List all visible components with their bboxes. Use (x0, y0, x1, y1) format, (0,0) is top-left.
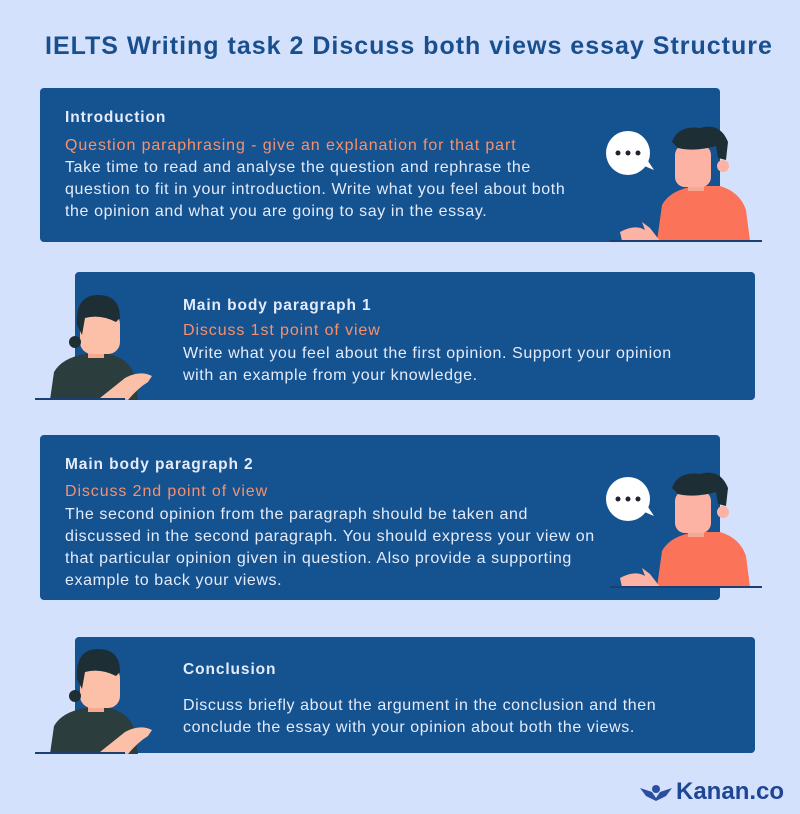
icon: man with speech bubble 1 (606, 126, 762, 242)
subtitle: introduction: Question paraphrasing - give an explanation for that part (65, 137, 517, 154)
text: body 2: that particular opinion given in question. Also provide a supporting (65, 550, 572, 567)
subtitle: body 2: Discuss 2nd point of view (65, 483, 268, 500)
text: conclusion: conclude the essay with your opinion about both the views. (183, 719, 635, 736)
text: body 2 (65, 506, 595, 589)
heading: body 2: Main body paragraph 2 (65, 456, 254, 473)
text: conclusion (183, 697, 656, 736)
panel: conclusion (75, 637, 755, 753)
text: body 1: Write what you feel about the first opinion. Support your opinion (183, 345, 672, 362)
text: body 2: The second opinion from the paragraph should be taken and (65, 506, 528, 523)
icon: man with speech bubble 2 (606, 472, 762, 588)
text: introduction: question to fit in your introduction. Write what you feel about both (65, 181, 565, 198)
panel: main body paragraph 1 (75, 272, 755, 400)
text: conclusion: Discuss briefly about the argument in the conclusion and then (183, 697, 656, 714)
text: body 1: with an example from your knowledge. (183, 367, 478, 384)
text: body 2: discussed in the second paragraph. You should express your view on (65, 528, 595, 545)
icon: man gesturing 2 (35, 649, 152, 754)
text: body 1 (183, 345, 672, 384)
heading: body 1: Main body paragraph 1 (183, 297, 372, 314)
panel: introduction (40, 88, 720, 242)
panel: main body paragraph 2 (40, 435, 720, 600)
heading: conclusion: Conclusion (183, 661, 276, 678)
title: IELTS Writing task 2 Discuss both views essay Structure (45, 32, 773, 60)
heading: introduction: Introduction (65, 109, 166, 126)
text: introduction: the opinion and what you are going to say in the essay. (65, 203, 487, 220)
text: body 2: example to back your views. (65, 572, 282, 589)
logo: Kanan.co: Kanan.co (676, 778, 784, 805)
text: introduction: Take time to read and analyse the question and rephrase the (65, 159, 531, 176)
text: introduction (65, 159, 565, 220)
icon: man gesturing 1 (35, 295, 152, 400)
subtitle: body 1: Discuss 1st point of view (183, 322, 381, 339)
